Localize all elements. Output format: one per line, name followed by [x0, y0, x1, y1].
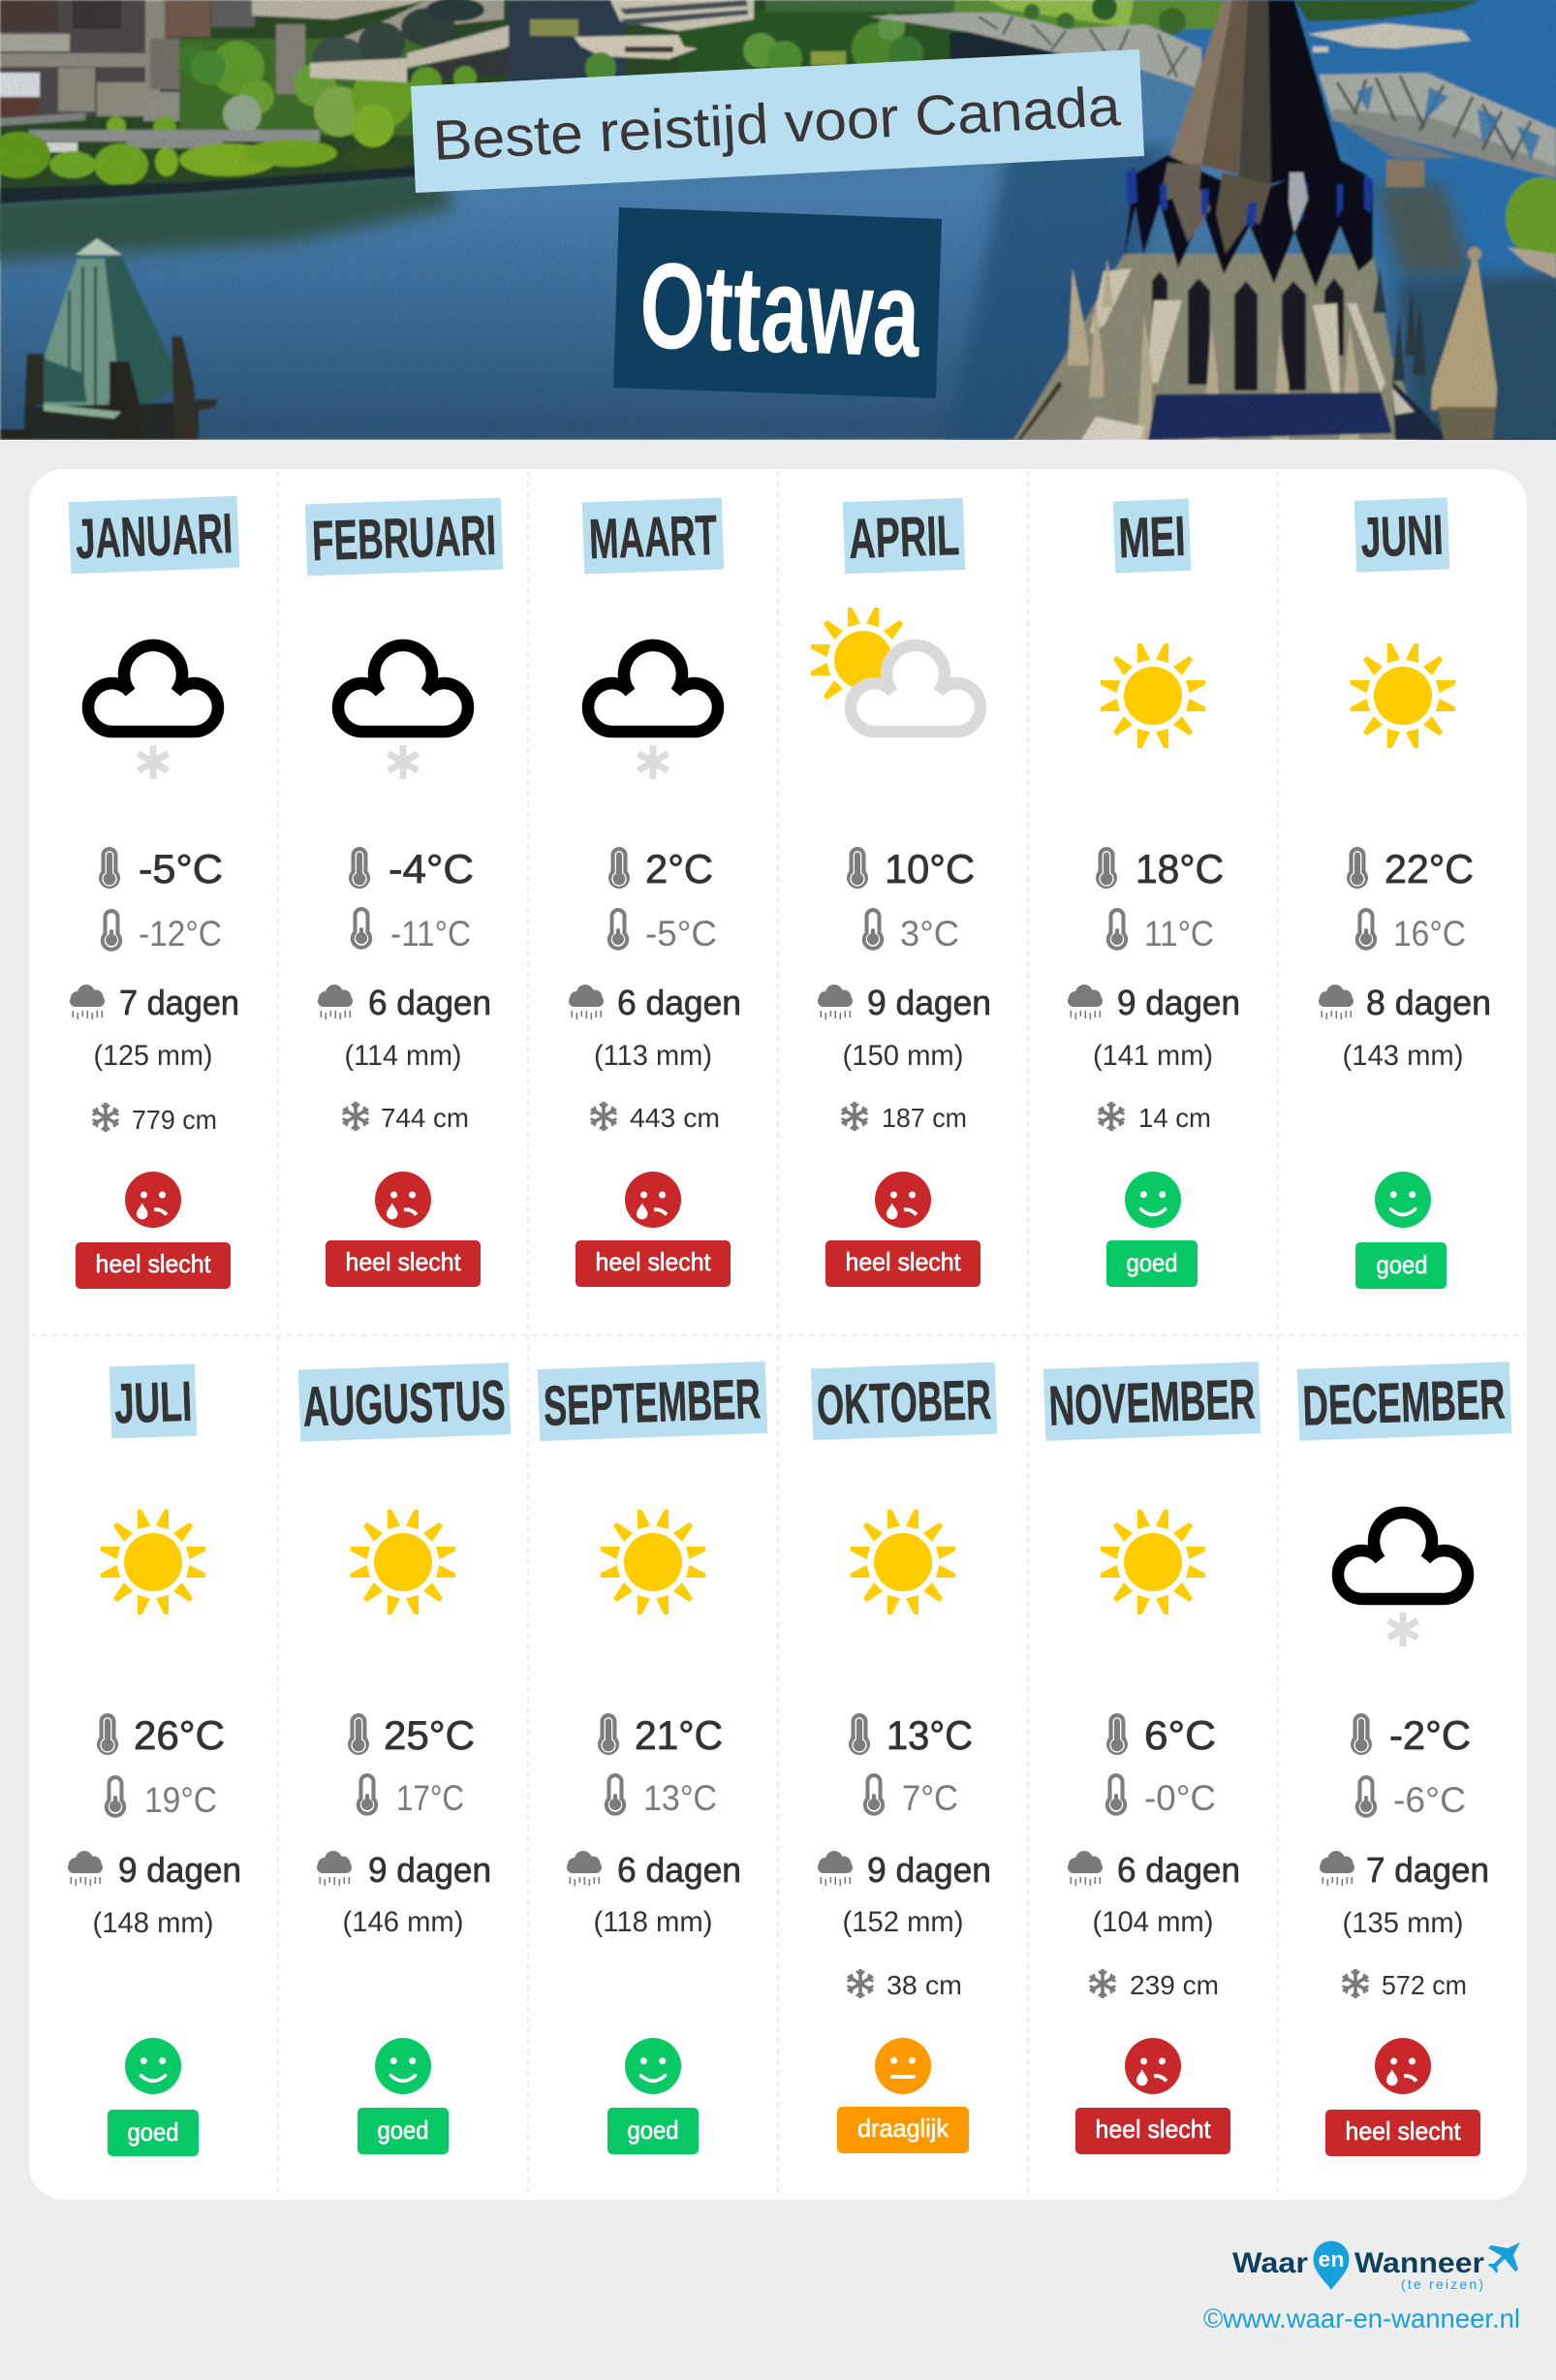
rainfall: (114 mm)	[345, 1040, 461, 1072]
panel: months grid	[29, 469, 1527, 2200]
heading: april: APRIL	[848, 504, 960, 571]
heading: juni: JUNI	[1359, 504, 1445, 569]
icon: sun	[851, 1510, 955, 1614]
icon: sun	[1351, 643, 1455, 748]
month: januari	[69, 496, 239, 1289]
low temperature	[1108, 910, 1214, 954]
low temperature: -12°C	[139, 914, 222, 954]
water and foliage texture	[0, 0, 1556, 440]
heading: mei: MEI	[1117, 505, 1187, 570]
rating label: heel slecht	[595, 1247, 711, 1276]
snowfall: 779 cm	[132, 1105, 217, 1135]
rating label	[326, 1240, 481, 1287]
rating label	[1106, 1240, 1198, 1287]
heading: september: SEPTEMBER	[543, 1367, 762, 1438]
rating label: heel slecht	[1345, 2116, 1461, 2145]
land right of bridge	[954, 0, 1230, 29]
heading: februari: FEBRUARI	[311, 504, 497, 573]
top centre building	[509, 0, 625, 87]
snowfall	[93, 1103, 217, 1135]
base railing and lower roofs	[1148, 392, 1392, 440]
heading: maart: MAART	[588, 504, 718, 571]
rainfall: (146 mm)	[343, 1906, 463, 1938]
heading: maart	[582, 498, 724, 574]
rating label: heel slecht	[345, 1247, 461, 1276]
low temperature	[1357, 1777, 1466, 1820]
rating icon	[125, 1172, 181, 1228]
high temperature: -5°C	[139, 846, 223, 892]
low temperature	[353, 909, 471, 954]
title banner: Beste reistijd voor Canada	[431, 75, 1123, 172]
icon: sun	[601, 1510, 705, 1614]
snowfall: 187 cm	[882, 1103, 967, 1133]
snowfall	[591, 1102, 720, 1133]
low temperature	[1357, 910, 1466, 954]
spire	[1167, 0, 1232, 165]
rain days: 7 dagen	[119, 983, 239, 1022]
low temperature: 3°C	[900, 914, 959, 954]
rain days: 6 dagen	[1117, 1850, 1240, 1890]
high temperature	[598, 1712, 723, 1758]
rating icon	[375, 1172, 431, 1228]
month: februari	[305, 498, 503, 1287]
snowfall: 443 cm	[630, 1103, 720, 1133]
heading: januari	[69, 496, 239, 574]
month: maart	[569, 498, 741, 1287]
rating icon	[875, 2038, 931, 2094]
rain days	[70, 983, 239, 1022]
rating label	[1325, 2110, 1480, 2156]
snowfall: 38 cm	[887, 1970, 962, 2000]
low temperature: -5°C	[645, 914, 717, 954]
icon: snow cloud	[88, 645, 218, 779]
month: juni	[1319, 497, 1491, 1289]
logo: Waar en Wanneer	[1232, 2240, 1520, 2292]
icon: sun	[1101, 1510, 1205, 1614]
low temperature	[609, 910, 717, 954]
left tower	[76, 238, 122, 255]
snowfall	[1099, 1102, 1211, 1133]
rain days: 6 dagen	[617, 983, 741, 1022]
rating label: goed	[628, 2115, 678, 2145]
snowfall: 14 cm	[1138, 1103, 1211, 1133]
bridge right	[1319, 73, 1556, 174]
rating label: heel slecht	[1095, 2114, 1211, 2144]
month: september	[538, 1362, 767, 2154]
icon: snow cloud	[1338, 1513, 1468, 1646]
low temperature: 7°C	[902, 1778, 958, 1818]
snowfall: 572 cm	[1382, 1970, 1467, 2000]
rainfall: (143 mm)	[1343, 1040, 1463, 1072]
rating label	[576, 1240, 731, 1287]
heading: oktober	[811, 1362, 997, 1440]
rating label: goed	[1376, 1250, 1428, 1279]
rating label: goed	[1126, 1248, 1178, 1277]
high temperature: 2°C	[645, 846, 713, 892]
icon: airplane	[1488, 2242, 1520, 2272]
heading: juli: JULI	[113, 1370, 193, 1435]
rating icon	[1375, 2038, 1431, 2094]
snowfall	[343, 1102, 469, 1133]
heading: februari	[305, 498, 503, 576]
little spire	[1431, 244, 1497, 410]
high temperature: -4°C	[389, 846, 474, 892]
month: oktober	[811, 1362, 997, 2153]
snowfall: 239 cm	[1130, 1970, 1219, 2000]
month: december	[1297, 1362, 1511, 2156]
logo: Waar en Wanneer: Wanneer	[1354, 2247, 1484, 2279]
rain days: 6 dagen	[368, 983, 491, 1022]
low temperature	[864, 910, 959, 954]
low temperature: -11°C	[390, 914, 471, 954]
lower tower stone	[1013, 254, 1424, 440]
rating label: goed	[128, 2117, 178, 2146]
title banner	[411, 49, 1144, 193]
low temperature	[107, 1777, 217, 1820]
high temperature: 26°C	[134, 1712, 225, 1758]
snowfall: 744 cm	[381, 1103, 469, 1133]
snowfall	[1343, 1969, 1467, 2000]
rainfall: (148 mm)	[93, 1907, 213, 1939]
rainfall: (118 mm)	[593, 1906, 713, 1938]
rain days: 8 dagen	[1366, 983, 1491, 1022]
heading: januari: JANUARI	[75, 502, 233, 571]
low temperature: 16°C	[1393, 914, 1466, 954]
rating label	[825, 1240, 980, 1287]
rating icon	[125, 2038, 181, 2094]
low temperature	[358, 1775, 464, 1818]
high temperature: 21°C	[635, 1712, 723, 1758]
rating icon	[625, 1172, 681, 1228]
icon: snow cloud	[588, 645, 718, 779]
rating label	[837, 2107, 969, 2153]
rating label	[108, 2110, 199, 2156]
heading: augustus: AUGUSTUS	[301, 1368, 507, 1439]
rain days	[68, 1850, 241, 1890]
land top	[0, 0, 767, 190]
high temperature: -2°C	[1389, 1712, 1471, 1758]
rating icon	[1125, 2038, 1181, 2094]
city name: Ottawa	[613, 207, 942, 398]
icon: sun	[351, 1510, 455, 1614]
high temperature	[1106, 1712, 1216, 1758]
bridge left	[949, 31, 1064, 59]
rain days: 9 dagen	[867, 983, 991, 1022]
heading: mei	[1113, 499, 1191, 573]
rain days: 9 dagen	[867, 1850, 991, 1890]
website credit: ©www.waar-en-wanneer.nl	[1203, 2303, 1520, 2333]
rating label: heel slecht	[95, 1249, 211, 1278]
icon: map pin: en	[1318, 2247, 1345, 2271]
logo: Waar en Wanneer: Waar	[1232, 2247, 1308, 2279]
rating icon	[875, 1172, 931, 1228]
month: augustus	[298, 1362, 511, 2154]
rating icon	[375, 2038, 431, 2094]
heading: oktober: OKTOBER	[816, 1368, 992, 1437]
rating icon	[1125, 1172, 1181, 1228]
heading: juli	[109, 1363, 197, 1439]
icon: sun	[101, 1510, 205, 1614]
rain days: 7 dagen	[1366, 1850, 1489, 1890]
low temperature	[865, 1775, 958, 1818]
rating icon	[1375, 1172, 1431, 1228]
rating icon	[625, 2038, 681, 2094]
rainfall: (141 mm)	[1093, 1040, 1213, 1072]
low temperature	[1107, 1775, 1216, 1818]
dark right pinnacles	[1373, 268, 1426, 381]
heading: juni	[1354, 497, 1449, 573]
rainfall: (113 mm)	[594, 1040, 712, 1072]
rating label	[76, 1242, 231, 1289]
rainfall: (152 mm)	[843, 1906, 963, 1938]
heading: september	[538, 1362, 767, 1441]
rainfall: (104 mm)	[1093, 1906, 1213, 1938]
high temperature	[608, 846, 713, 892]
rain days: 6 dagen	[617, 1850, 741, 1890]
low temperature: 17°C	[396, 1778, 464, 1818]
month: april	[811, 498, 991, 1287]
city name: Ottawa: Ottawa	[638, 236, 922, 383]
heading: november	[1043, 1362, 1260, 1441]
rain days: 9 dagen	[1117, 983, 1240, 1022]
decorative trees	[179, 39, 421, 136]
low temperature: 13°C	[643, 1778, 717, 1818]
rating label	[607, 2108, 699, 2154]
snowfall	[1089, 1969, 1219, 2000]
icon: snow cloud	[338, 645, 468, 779]
high temperature	[99, 846, 223, 892]
high temperature: 6°C	[1144, 1712, 1216, 1758]
rainfall: (125 mm)	[93, 1040, 213, 1072]
low temperature	[103, 911, 222, 954]
heading: augustus	[298, 1362, 511, 1442]
month: juli	[68, 1363, 241, 2156]
high temperature	[349, 846, 474, 892]
high temperature: 22°C	[1385, 846, 1474, 892]
windows	[1152, 271, 1344, 391]
icon: sun behind cloud	[811, 608, 980, 732]
rain days: 9 dagen	[368, 1850, 491, 1890]
dark gables	[1124, 155, 1373, 288]
rainfall: (150 mm)	[843, 1040, 963, 1072]
rating label	[358, 2108, 449, 2154]
low temperature	[607, 1775, 717, 1818]
high temperature	[849, 1712, 973, 1758]
buttresses and pinnacles	[1090, 268, 1385, 392]
month: mei	[1068, 499, 1240, 1287]
rainfall: (135 mm)	[1343, 1907, 1463, 1939]
header photo: Ottawa river and Parliament library	[0, 0, 1556, 465]
island	[1506, 177, 1556, 259]
rating label: heel slecht	[845, 1247, 961, 1276]
rating label	[1075, 2108, 1230, 2154]
heading: november: NOVEMBER	[1047, 1367, 1257, 1438]
low temperature: -0°C	[1144, 1778, 1216, 1818]
rain days: 9 dagen	[118, 1850, 241, 1890]
low temperature: 19°C	[144, 1780, 217, 1820]
rating label: draaglijk	[857, 2114, 949, 2143]
rain days	[317, 1850, 491, 1890]
rain days	[318, 983, 491, 1022]
rating label: goed	[378, 2115, 428, 2145]
high temperature	[1096, 846, 1224, 892]
high temperature: 13°C	[887, 1712, 973, 1758]
high temperature	[1351, 1712, 1471, 1758]
snowfall	[847, 1969, 962, 2000]
heading: april	[843, 498, 965, 574]
low temperature: -6°C	[1393, 1780, 1466, 1820]
icon: map pin	[1314, 2240, 1349, 2290]
snowfall	[841, 1102, 967, 1133]
rating label	[1355, 1242, 1447, 1289]
high temperature: 25°C	[384, 1712, 475, 1758]
month: november	[1043, 1362, 1260, 2154]
high temperature: 10°C	[885, 846, 975, 892]
low temperature: 11°C	[1144, 914, 1214, 954]
high temperature: 18°C	[1136, 846, 1224, 892]
high temperature	[1347, 846, 1474, 892]
museum	[252, 0, 426, 19]
logo: Waar en Wanneer: (te reizen)	[1401, 2276, 1483, 2292]
icon: sun	[1101, 643, 1205, 748]
